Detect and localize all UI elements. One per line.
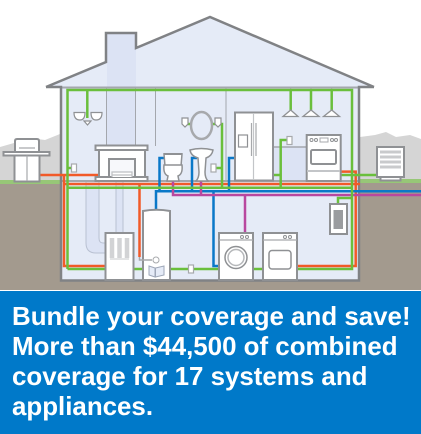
orange pipes bbox=[40, 172, 360, 266]
wall heater bbox=[330, 204, 347, 234]
chimney bbox=[107, 33, 136, 145]
green pipes bbox=[67, 90, 377, 269]
banner bbox=[0, 291, 421, 434]
washer bbox=[219, 233, 253, 280]
banner line 3: coverage for 17 systems and bbox=[12, 363, 367, 391]
pipes bbox=[40, 90, 421, 269]
bushes bbox=[0, 132, 421, 182]
outlets bbox=[72, 136, 292, 273]
fireplace bbox=[96, 146, 148, 181]
roof and outer walls bbox=[46, 17, 374, 280]
water heater bbox=[143, 210, 170, 280]
furnace bbox=[106, 233, 134, 280]
water softener valve bbox=[140, 257, 164, 277]
range bbox=[307, 135, 341, 181]
refrigerator bbox=[235, 112, 273, 180]
house illustration bbox=[0, 16, 421, 290]
banner line 1: Bundle your coverage and save! bbox=[12, 302, 411, 330]
dryer bbox=[263, 233, 297, 280]
interior walls bbox=[60, 87, 360, 181]
pendant lights bbox=[283, 110, 340, 116]
sconces bbox=[182, 118, 221, 127]
outdoor ac unit bbox=[377, 147, 404, 180]
toilet bbox=[164, 154, 182, 181]
chandelier bbox=[74, 112, 102, 125]
grill bbox=[4, 139, 50, 182]
blue pipes bbox=[156, 158, 421, 266]
grass bbox=[0, 179, 421, 184]
sink bbox=[190, 148, 213, 181]
banner line 2: More than $44,500 of combined bbox=[12, 333, 398, 361]
house interior bbox=[46, 17, 374, 280]
mirror bbox=[191, 112, 212, 139]
ducts bbox=[86, 181, 123, 253]
counter bbox=[273, 147, 307, 181]
ground bbox=[0, 182, 421, 290]
banner line 4: appliances. bbox=[12, 393, 153, 421]
magenta pipes bbox=[173, 181, 421, 233]
